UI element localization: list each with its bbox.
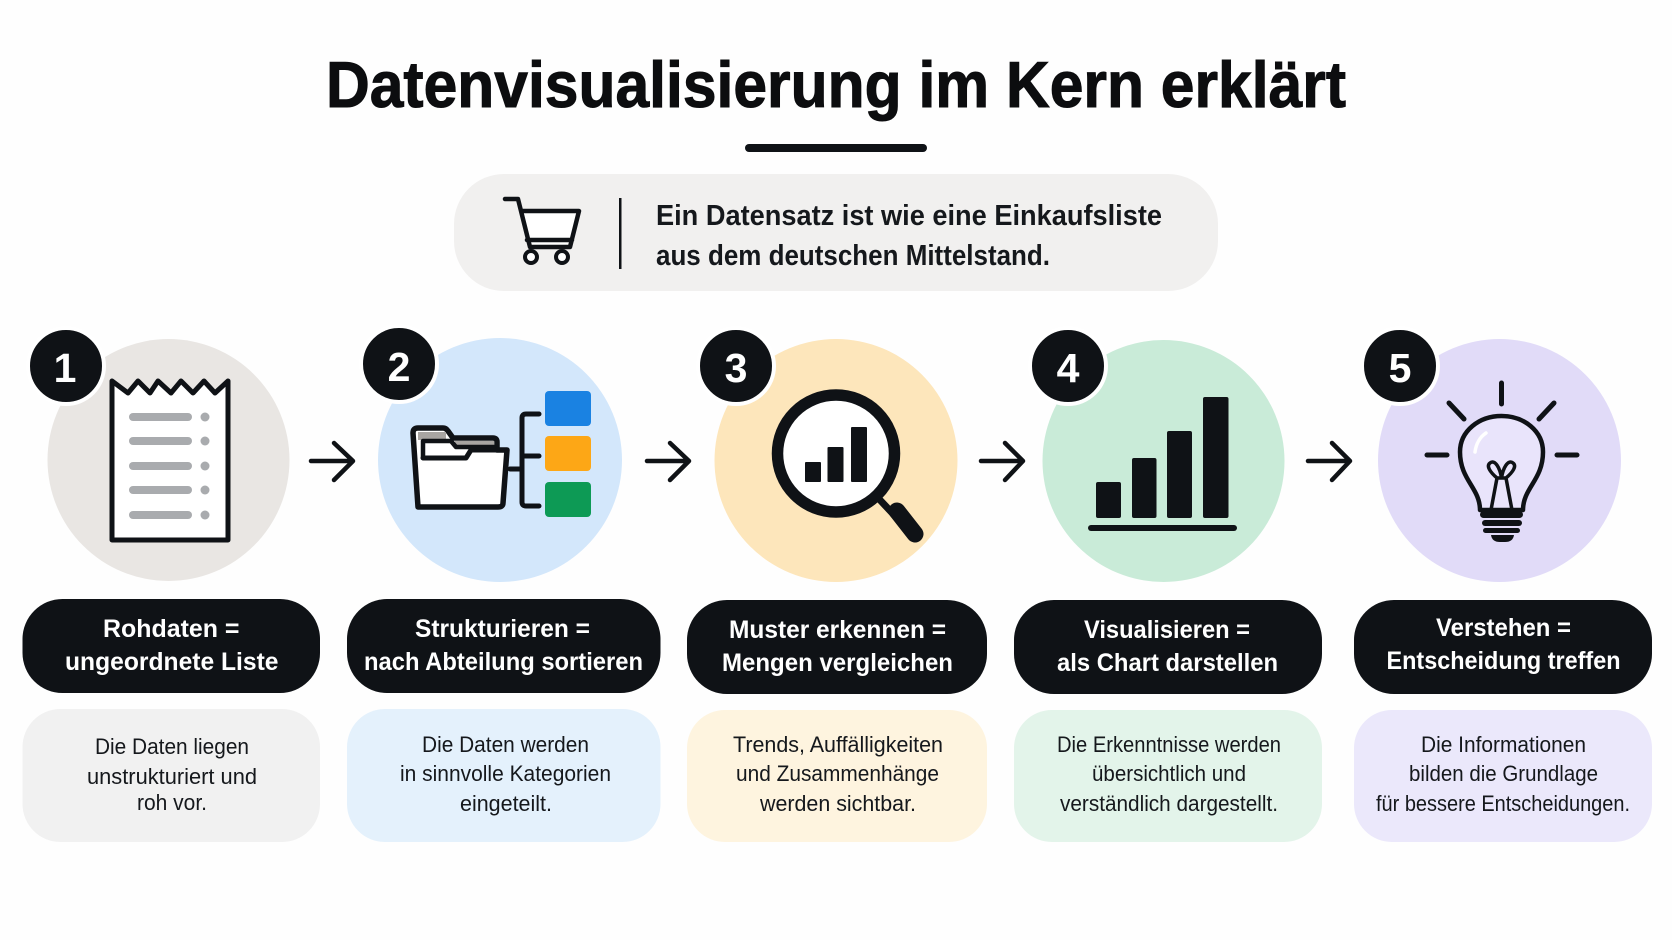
badge 5: 5	[1389, 345, 1411, 391]
icon: receipt	[112, 381, 228, 540]
pill 3: Mengen vergleichen	[722, 649, 953, 677]
badge 2	[361, 326, 437, 402]
icon: magnifying glass with bars	[778, 395, 915, 534]
card 1: roh vor.	[137, 790, 207, 815]
arrow 3	[981, 443, 1023, 480]
card 3: werden sichtbar.	[759, 791, 916, 816]
pill 4	[1014, 600, 1322, 694]
badge 1: 1	[54, 345, 76, 391]
pill 1: Rohdaten =	[103, 615, 240, 643]
pill 3: Muster erkennen =	[729, 616, 946, 644]
pill 2: nach Abteilung sortieren	[364, 648, 643, 676]
title underline	[745, 144, 927, 152]
step 2 circle	[378, 338, 622, 582]
pill 1	[22, 599, 320, 693]
badge 3: 3	[725, 345, 747, 391]
step 4 circle	[1042, 340, 1284, 582]
card 2: Die Daten werden	[422, 732, 589, 757]
card 5: Die Informationen	[1421, 732, 1586, 757]
pill 5: Verstehen =	[1436, 614, 1571, 642]
step 5 circle	[1378, 339, 1621, 582]
card 5	[1354, 710, 1652, 842]
card 5: für bessere Entscheidungen.	[1376, 791, 1630, 816]
callout text	[656, 200, 1162, 272]
arrow 2	[647, 443, 689, 480]
icon: folder with categories	[413, 391, 591, 517]
pill 5: Entscheidung treffen	[1386, 647, 1620, 675]
badge 4	[1030, 328, 1106, 404]
card 4	[1014, 710, 1322, 842]
card 5: bilden die Grundlage	[1409, 761, 1598, 786]
pill 3	[687, 600, 987, 694]
step 3 circle	[714, 339, 958, 582]
card 2: in sinnvolle Kategorien	[400, 761, 611, 786]
pill 2	[347, 599, 660, 693]
pill 1: ungeordnete Liste	[65, 648, 279, 676]
card 1: Die Daten liegen	[95, 734, 249, 759]
pill 4: Visualisieren =	[1084, 616, 1250, 644]
badge 5	[1362, 328, 1438, 404]
card 3: und Zusammenhänge	[736, 761, 939, 786]
card 1: unstrukturiert und	[87, 764, 257, 789]
card 3	[687, 710, 987, 842]
step 1 circle	[48, 339, 290, 581]
badge 1	[28, 328, 104, 404]
pill 4: als Chart darstellen	[1057, 649, 1278, 677]
card 2: eingeteilt.	[460, 791, 552, 816]
card 2	[347, 709, 660, 842]
icon: bar chart	[1088, 397, 1237, 531]
card 4: Die Erkenntnisse werden	[1057, 732, 1281, 757]
pill 2: Strukturieren =	[415, 615, 590, 643]
card 4: übersichtlich und	[1092, 761, 1246, 786]
badge 2: 2	[388, 344, 410, 390]
arrow 4	[1308, 443, 1350, 480]
callout text: aus dem deutschen Mittelstand.	[656, 240, 1050, 272]
card 3: Trends, Auffälligkeiten	[733, 732, 943, 757]
icon: light bulb	[1427, 383, 1577, 542]
pill 5	[1354, 600, 1652, 694]
card 4: verständlich dargestellt.	[1060, 791, 1278, 816]
icon: shopping cart	[505, 199, 579, 263]
badge 3	[698, 328, 774, 404]
card 1	[22, 709, 320, 842]
badge 4: 4	[1057, 345, 1080, 391]
callout text: Ein Datensatz ist wie eine Einkaufsliste	[656, 200, 1162, 232]
callout: shopping list analogy	[454, 174, 1218, 291]
title: Datenvisualisierung im Kern erklärt	[326, 48, 1346, 121]
arrow 1	[311, 443, 353, 480]
